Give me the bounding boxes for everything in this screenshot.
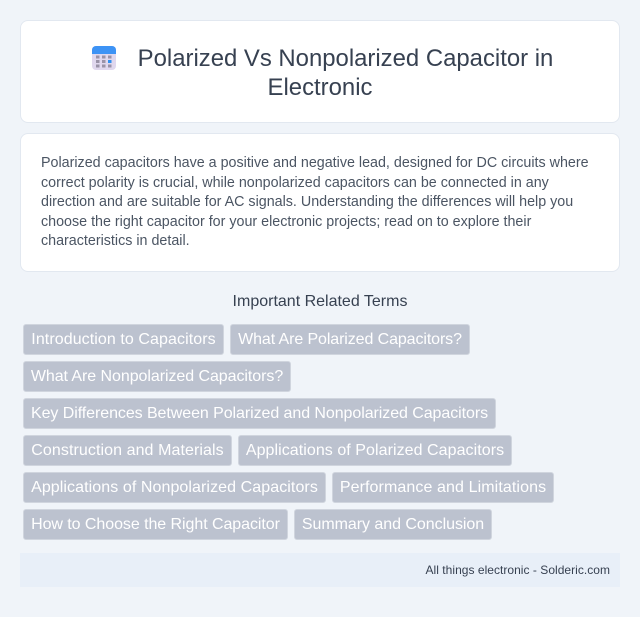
intro paragraph xyxy=(41,155,589,249)
tag xyxy=(230,324,470,355)
title: Polarized Vs Nonpolarized Capacitor in xyxy=(138,45,553,72)
tag: Construction and Materials xyxy=(31,442,224,459)
intro paragraph: choose the right capacitor for your electronic projects; read on to explore their xyxy=(41,214,531,230)
title xyxy=(138,45,553,101)
heading: important related terms: Important Related Terms xyxy=(233,293,407,310)
tag xyxy=(23,509,288,540)
icon: calendar xyxy=(92,46,116,70)
tag: Summary and Conclusion xyxy=(302,516,484,533)
tag: Introduction to Capacitors xyxy=(31,331,216,348)
tag xyxy=(23,324,224,355)
tag xyxy=(23,361,291,392)
intro paragraph: correct polarity is crucial, while nonpolarized capacitors can be connected in any xyxy=(41,174,549,190)
tag: What Are Polarized Capacitors? xyxy=(238,331,462,348)
intro paragraph: direction and are suitable for AC signals. Understanding the differences will help you xyxy=(41,194,573,210)
footer bar xyxy=(20,553,620,587)
panel: title card xyxy=(20,20,620,123)
tag: Applications of Nonpolarized Capacitors xyxy=(31,479,318,496)
tag list xyxy=(23,324,554,540)
tag: Applications of Polarized Capacitors xyxy=(246,442,504,459)
tag: Key Differences Between Polarized and Nonpolarized Capacitors xyxy=(31,405,488,422)
tag: How to Choose the Right Capacitor xyxy=(31,516,280,533)
tag xyxy=(294,509,492,540)
tag xyxy=(23,398,496,429)
intro paragraph: characteristics in detail. xyxy=(41,233,190,249)
panel: intro card xyxy=(20,133,620,272)
tag xyxy=(23,472,326,503)
footer text: All things electronic - Solderic.com xyxy=(426,563,610,577)
tag xyxy=(332,472,554,503)
tag: What Are Nonpolarized Capacitors? xyxy=(31,368,283,385)
intro paragraph: Polarized capacitors have a positive and negative lead, designed for DC circuits where xyxy=(41,155,589,171)
tag xyxy=(238,435,512,466)
tag: Performance and Limitations xyxy=(340,479,546,496)
tag xyxy=(23,435,232,466)
title: Electronic xyxy=(268,74,372,101)
